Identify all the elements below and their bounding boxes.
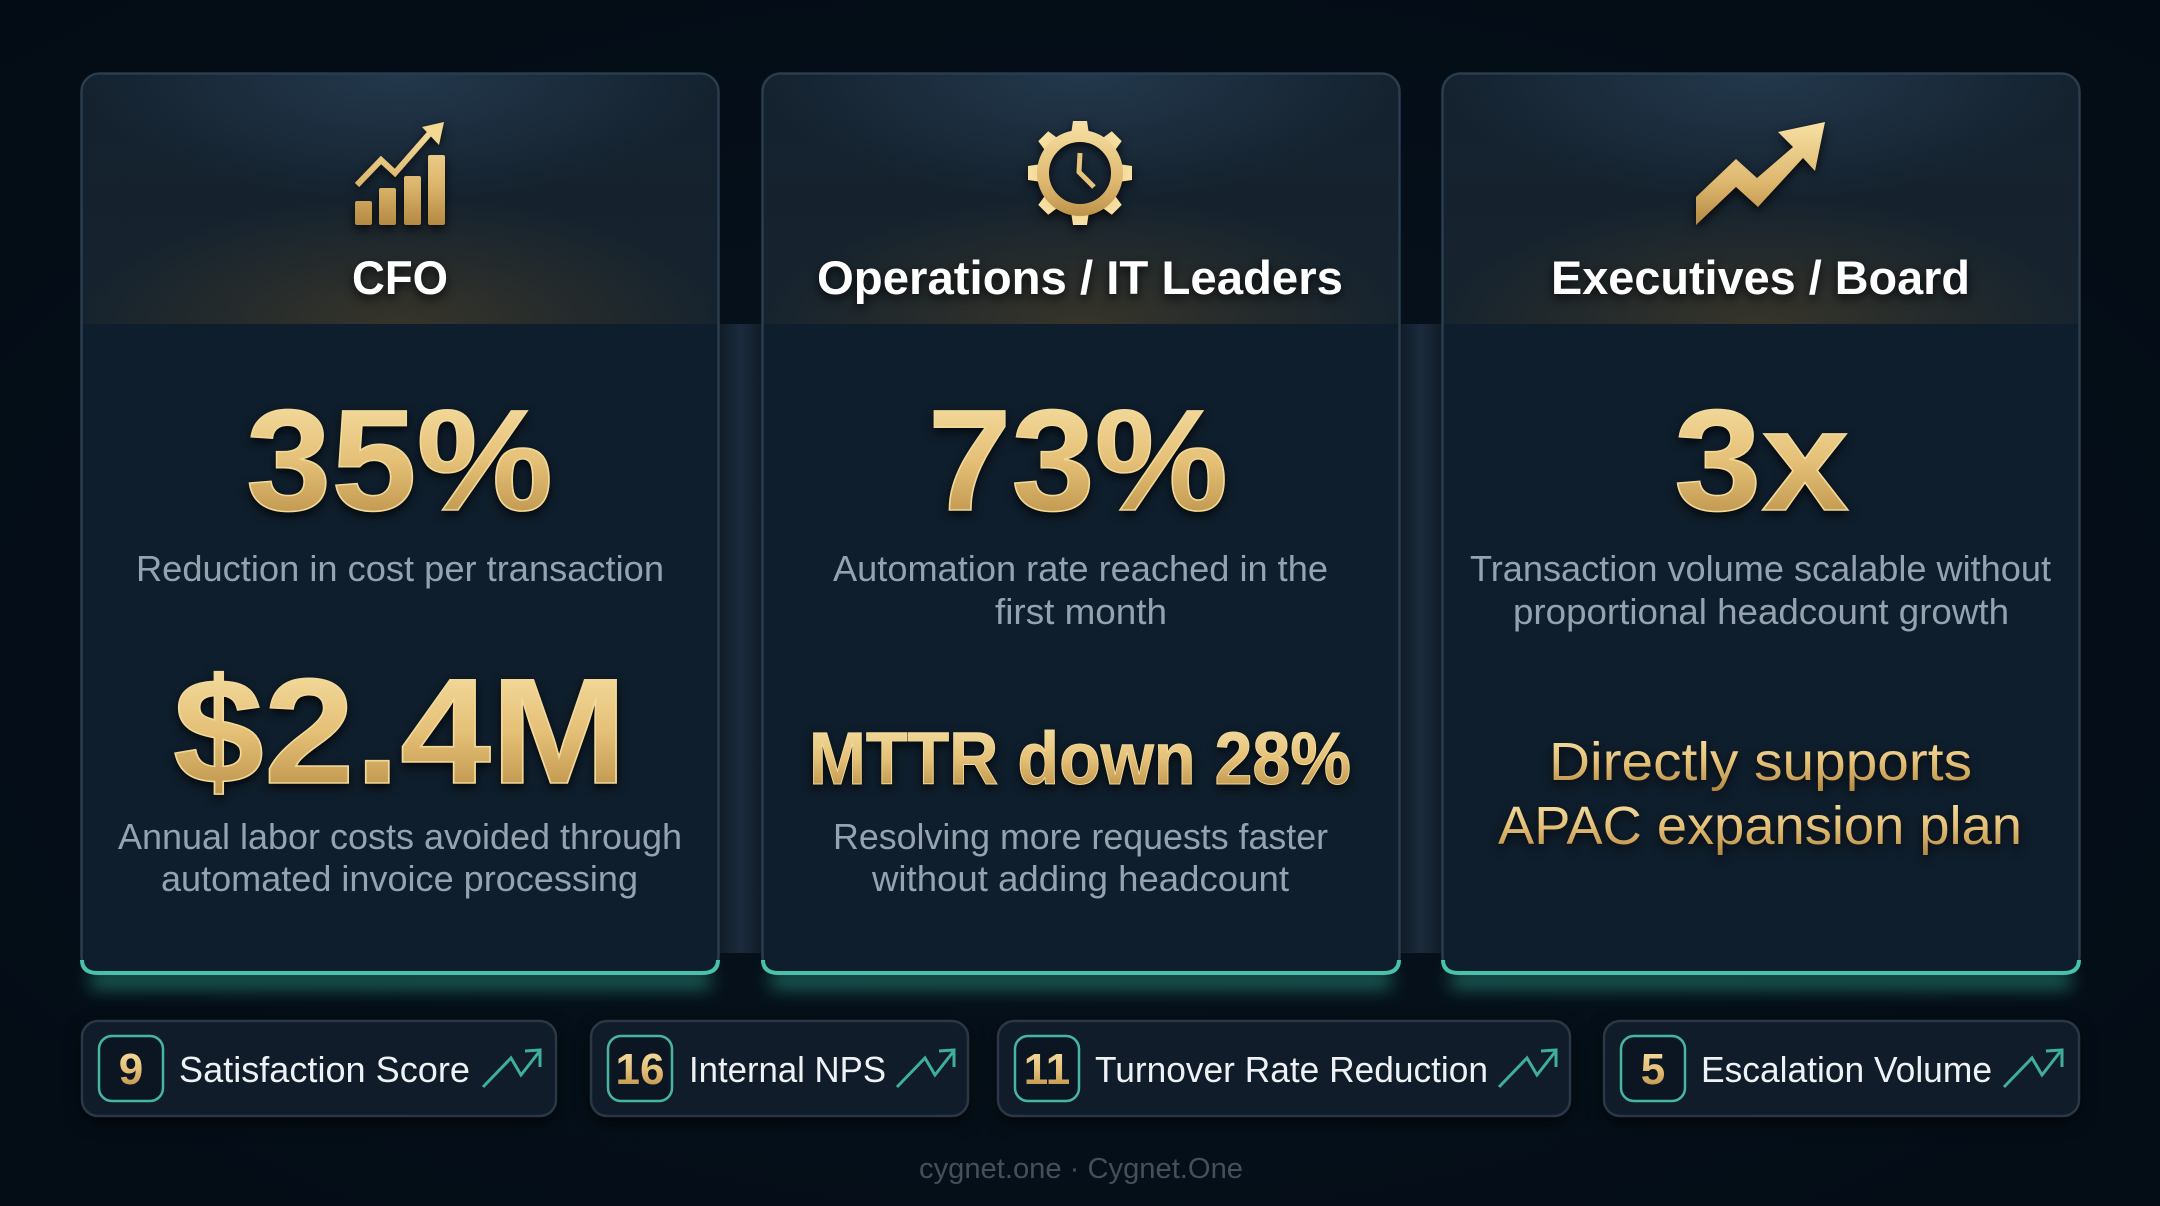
card border [82, 74, 718, 974]
badge: 9: 9 [119, 1045, 143, 1094]
badge: 16 [608, 1036, 672, 1101]
metric: $2.4M: $2.4M [173, 647, 627, 815]
metric: MTTR down 28%: MTTR down 28% [809, 717, 1351, 800]
label: Turnover Rate Reduction [1095, 1049, 1488, 1090]
icon: bar chart with arrow [355, 122, 445, 225]
footer credit: cygnet.one · Cygnet.One [919, 1153, 1243, 1185]
card body [81, 73, 719, 975]
panel: Operations / IT Leaders [762, 73, 1400, 988]
icon: trend arrow [1499, 1050, 1556, 1087]
callout: APAC expansion: Directly supports [1549, 732, 1972, 792]
description: labor costs: Annual labor costs avoided through [118, 816, 682, 857]
card header band [81, 73, 719, 324]
metric: 35%: 35% [246, 380, 553, 541]
teal bottom edge [82, 960, 718, 973]
heading: Operations / IT Leaders: Operations / IT Leaders [817, 251, 1343, 304]
heading: CFO: CFO [352, 251, 448, 304]
card border [762, 74, 1400, 974]
connector strip between cards 1 and 2 [719, 324, 762, 953]
card teal glow [1451, 972, 2071, 988]
badge: 5: 5 [1641, 1045, 1665, 1094]
badge: 5 [1621, 1036, 1685, 1101]
card border [1442, 74, 2080, 974]
icon: trend arrow [483, 1050, 540, 1087]
badge: 16: 16 [616, 1045, 664, 1094]
description: labor costs: automated invoice processing [161, 858, 638, 899]
pill: Internal NPS [591, 1021, 968, 1116]
pill: Turnover Rate Reduction [998, 1021, 1570, 1116]
heading: Executives / Board: Executives / Board [1551, 251, 1970, 304]
description: resolving requests [833, 816, 1328, 899]
pill: Satisfaction Score [82, 1021, 556, 1116]
description: automation rate: Automation rate reached in the [833, 548, 1328, 589]
description: automation rate [833, 548, 1328, 632]
description: cost per transaction: Reduction in cost per transaction [136, 548, 664, 589]
icon: gear with clock [1028, 121, 1132, 225]
metric: 3x: 3x [1674, 380, 1849, 541]
icon: trend arrow [2004, 1050, 2062, 1087]
description: resolving requests: without adding headcount [871, 858, 1289, 899]
callout: APAC expansion [1498, 732, 2022, 856]
card body [1442, 73, 2080, 975]
icon: trend arrow [897, 1050, 954, 1087]
panel: Executives / Board [1442, 73, 2080, 988]
teal bottom edge [763, 960, 1399, 973]
card header band [1442, 73, 2080, 324]
label: Escalation Volume [1701, 1049, 1992, 1090]
card teal glow [90, 972, 710, 988]
metric: 73%: 73% [928, 380, 1228, 541]
panel: CFO [81, 73, 719, 988]
label: Satisfaction Score [179, 1049, 470, 1090]
badge: 11 [1015, 1036, 1079, 1101]
pill: Escalation Volume [1604, 1021, 2079, 1116]
badge: 11: 11 [1024, 1045, 1070, 1094]
description: transaction volume [1470, 548, 2051, 632]
teal bottom edge [1443, 960, 2079, 973]
description: transaction volume: proportional headcount growth [1513, 591, 2009, 632]
label: Internal NPS [689, 1049, 886, 1090]
icon: rising arrow [1696, 122, 1825, 225]
badge: 9 [99, 1036, 163, 1101]
card teal glow [771, 972, 1391, 988]
card header band [762, 73, 1400, 324]
connector strip between cards 2 and 3 [1400, 324, 1442, 953]
card body [762, 73, 1400, 975]
callout: APAC expansion: APAC expansion plan [1498, 796, 2022, 856]
description: labor costs [118, 816, 682, 899]
description: transaction volume: Transaction volume scalable without [1470, 548, 2051, 589]
description: resolving requests: Resolving more requests faster [833, 816, 1328, 857]
description: automation rate: first month [995, 591, 1167, 632]
